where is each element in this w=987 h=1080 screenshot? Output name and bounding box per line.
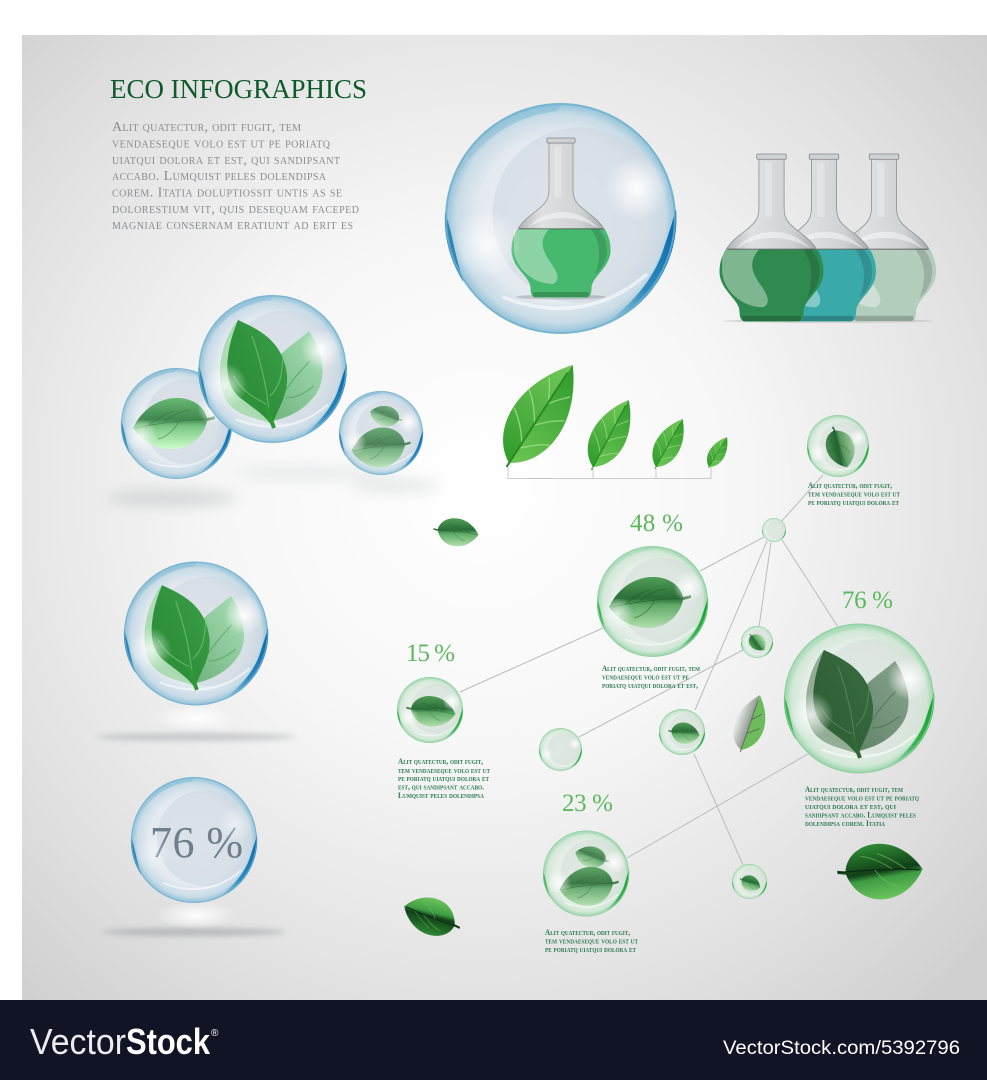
caption: 76 percent: vendaeseque volo est ut pe poriatq	[805, 794, 919, 802]
label: 15 percent: 15 %	[406, 640, 455, 667]
footer bar: VectorStock.com/5392796	[723, 1038, 960, 1059]
bubble: 76 percent	[131, 777, 257, 903]
caption: 76 percent	[805, 785, 919, 828]
bubble: two leaves large	[198, 295, 347, 443]
intro text block: magniae consernam eratiunt ad erit es	[112, 218, 353, 233]
small bubble: leaf upper	[741, 626, 773, 658]
title: ECO INFOGRAPHICS	[110, 74, 367, 104]
caption: 15 percent	[398, 757, 490, 800]
footer bar: Vector	[30, 1021, 126, 1062]
caption: 48 percent	[602, 664, 700, 690]
bubble shadows	[96, 467, 440, 936]
small bubble: leaf center	[659, 709, 705, 755]
intro text block: vendaeseque volo est ut pe poriatq	[112, 136, 331, 152]
intro text block: corem. Itatia doluptiossit untis as se	[112, 186, 342, 200]
bubble: 15 percent	[397, 677, 463, 743]
empty bubble	[539, 728, 582, 771]
bubble: 23 percent	[543, 830, 629, 916]
caption: 15 percent: Lumquist peles dolendipsa	[398, 791, 485, 800]
caption: 48 percent: vendaeseque volo est ut pe	[602, 672, 689, 682]
caption: 15 percent: est, qui sandipsant accabo.	[398, 782, 484, 792]
caption: 23 percent	[545, 928, 638, 954]
small empty bubble node	[762, 518, 786, 542]
intro text block: accabo. Lumquist peles dolendipsa	[112, 169, 327, 184]
caption: top right: tem vendaeseque volo est ut	[808, 490, 900, 498]
bubble: single leaf	[121, 368, 232, 479]
standalone leaf grey green	[726, 690, 774, 757]
caption: top right: Alit quatectur, odit fugit,	[808, 481, 892, 490]
three flasks	[720, 154, 935, 323]
bubble: 76 percent green	[784, 623, 934, 774]
intro text block: uiatqui dolora et est, qui sandipsant	[112, 153, 340, 168]
footer bar	[0, 1000, 987, 1080]
standalone leaf dark right	[834, 837, 927, 906]
caption: 76 percent: sandipsant accabo. Lumquist peles	[805, 810, 917, 820]
caption: 76 percent: dolendipsa corem. Itatia	[805, 819, 886, 828]
caption: 48 percent: Alit quatectur, odit fugit, tem	[602, 664, 700, 673]
caption: 76 percent: uiatqui dolora et est, qui	[805, 802, 897, 811]
bubble: 76 percent: 76 %	[150, 818, 243, 867]
footer bar: Stock	[126, 1021, 211, 1062]
caption: 15 percent: pe poriatq uiatqui dolora et	[398, 774, 489, 783]
caption: top right	[808, 481, 900, 507]
footer bar: ®	[211, 1028, 219, 1039]
large bubble with flask	[445, 103, 676, 334]
caption: top right: pe poriatq uiatqui dolora et	[808, 498, 899, 507]
caption: 23 percent: tem vendaeseque volo est ut	[545, 936, 638, 946]
standalone leaf top	[433, 518, 479, 546]
caption: 48 percent: poriatq uiatqui dolora et est,	[602, 681, 698, 690]
caption: 23 percent: Alit quatectur, odit fugit,	[545, 928, 630, 937]
label: 76 percent: 76 %	[842, 587, 893, 614]
intro text block: dolorestium vit, quis desequam faceped	[112, 202, 359, 217]
standalone leaf dark bottom	[399, 892, 465, 942]
label: 48 percent: 48 %	[630, 510, 683, 537]
growth leaves with bracket	[484, 350, 734, 481]
small bubble: leaf bottom	[732, 864, 767, 899]
label: 23 percent: 23 %	[562, 790, 613, 817]
caption: 23 percent: pe poriatq uiatqui dolora et	[545, 945, 636, 954]
caption: 15 percent: tem vendaeseque volo est ut	[398, 766, 490, 775]
caption: 15 percent: Alit quatectur, odit fugit,	[398, 757, 483, 766]
bubble: two small leaves	[339, 391, 423, 475]
intro text block: Alit quatectur, odit fugit, tem	[112, 120, 301, 135]
small bubble: top right leaf	[807, 415, 869, 477]
connector lines	[460, 475, 838, 865]
intro text block	[112, 120, 359, 233]
bubble: 48 percent	[597, 546, 708, 657]
caption: 76 percent: Alit quatectur, odit fugit, tem	[805, 785, 903, 794]
bubble: two leaves left column	[124, 561, 268, 706]
